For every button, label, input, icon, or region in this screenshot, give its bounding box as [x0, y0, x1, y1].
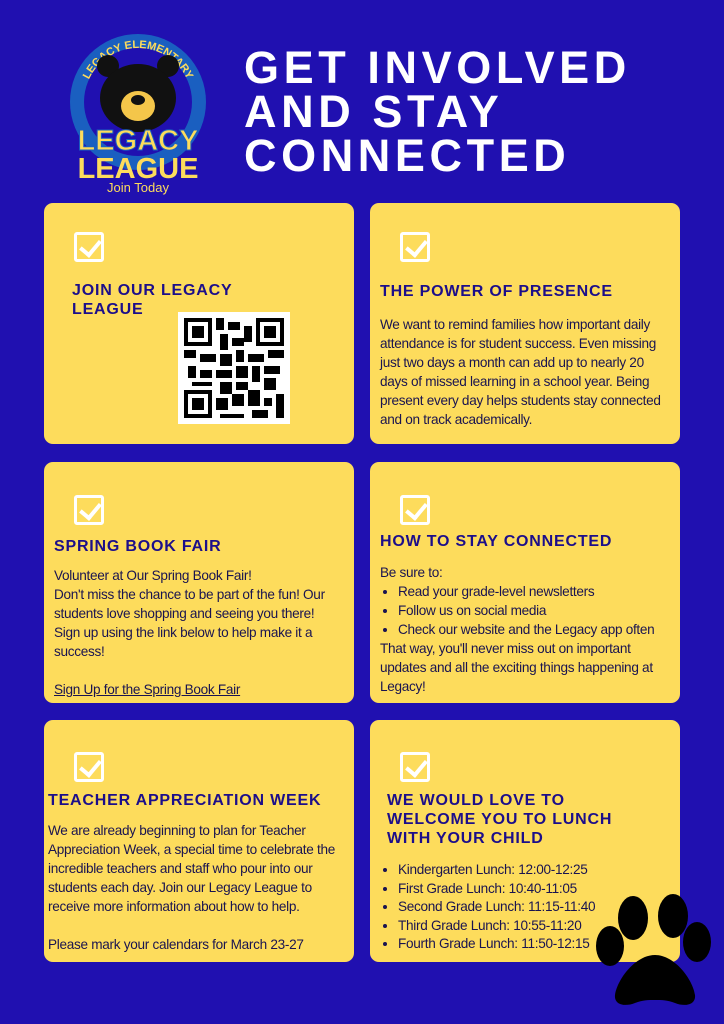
title	[244, 42, 631, 181]
text block: students each day. Join our Legacy League to	[48, 880, 312, 895]
text block: Don't miss the chance to be part of the fun! Our	[54, 587, 325, 602]
lunch list	[383, 862, 595, 951]
lunch list: Fourth Grade Lunch: 11:50-12:15	[398, 936, 589, 951]
lunch list: Kindergarten Lunch: 12:00-12:25	[398, 862, 587, 877]
text block	[380, 565, 654, 694]
text block: We are already beginning to plan for Teacher	[48, 823, 306, 838]
icon: checkbox	[74, 752, 104, 782]
icon: checkbox	[400, 232, 430, 262]
heading: WE WOULD LOVE TO	[387, 792, 565, 809]
icon: checkbox	[400, 752, 430, 782]
text block: Read your grade-level newsletters	[398, 584, 594, 599]
icon: checkbox	[74, 232, 104, 262]
heading: JOIN OUR LEGACY	[72, 282, 232, 299]
text block: updates and all the exciting things happening at	[380, 660, 653, 675]
text block: Sign up using the link below to help make it a	[54, 625, 312, 640]
panel: power of presence	[370, 203, 680, 444]
text block: Be sure to: That way, you'll never miss out on important	[380, 565, 631, 656]
heading: TEACHER APPRECIATION WEEK	[48, 792, 321, 809]
icon: checkbox	[400, 495, 430, 525]
text block: Check our website and the Legacy app often	[398, 622, 654, 637]
text block: We want to remind families how important daily	[380, 317, 650, 332]
panel: join legacy league	[44, 203, 354, 444]
text block	[380, 317, 661, 427]
text block: Appreciation Week, a special time to celebrate the	[48, 842, 335, 857]
heading	[387, 792, 612, 847]
text block: students love shopping and seeing you there!	[54, 606, 314, 621]
text block: attendance is for student success. Even missing	[380, 336, 656, 351]
title: CONNECTED	[244, 130, 570, 181]
heading: SPRING BOOK FAIR	[54, 538, 221, 555]
icon: paw print	[596, 894, 711, 1005]
text block: and on track academically.	[380, 412, 532, 427]
panel: spring book fair	[44, 462, 354, 703]
text block	[54, 568, 325, 697]
heading: HOW TO STAY CONNECTED	[380, 533, 612, 550]
heading: LEAGUE	[72, 301, 143, 318]
text block	[48, 823, 335, 952]
logo: LEAGUE	[78, 153, 198, 185]
text block: Please mark your calendars for March 23-27	[48, 937, 304, 952]
panel: how to stay connected	[370, 462, 680, 703]
text block: present every day helps students stay connected	[380, 393, 661, 408]
text block: Legacy!	[380, 679, 426, 694]
logo: Join Today	[107, 180, 169, 195]
heading	[72, 282, 232, 318]
lunch list: First Grade Lunch: 10:40-11:05	[398, 880, 577, 896]
panel: lunch	[370, 720, 680, 962]
heading: WELCOME YOU TO LUNCH	[387, 811, 612, 828]
text block: incredible teachers and staff who pour into our	[48, 861, 312, 876]
lunch list: Third Grade Lunch: 10:55-11:20	[398, 918, 581, 932]
text block: Volunteer at Our Spring Book Fair!	[54, 568, 252, 583]
text block: success!	[54, 644, 104, 659]
text block: Follow us on social media	[398, 603, 546, 618]
text block: just two days a month can add up to nearly 20	[380, 355, 644, 370]
logo: LEGACY	[78, 125, 198, 157]
text block: receive more information about how to help.	[48, 899, 300, 914]
logo: LEGACY ELEMENTARY	[82, 40, 194, 79]
panel: teacher appreciation week	[44, 720, 354, 962]
lunch list: Second Grade Lunch: 11:15-11:40	[398, 899, 595, 914]
text block: days of missed learning in a school year. Being	[380, 374, 649, 389]
title: AND STAY	[244, 86, 503, 137]
heading: WITH YOUR CHILD	[387, 830, 544, 847]
icon: checkbox	[74, 495, 104, 525]
title: GET INVOLVED	[244, 42, 631, 93]
qr code	[178, 312, 290, 424]
text block: Sign Up for the Spring Book Fair	[54, 682, 240, 697]
logo	[70, 34, 206, 195]
heading: THE POWER OF PRESENCE	[380, 283, 613, 300]
